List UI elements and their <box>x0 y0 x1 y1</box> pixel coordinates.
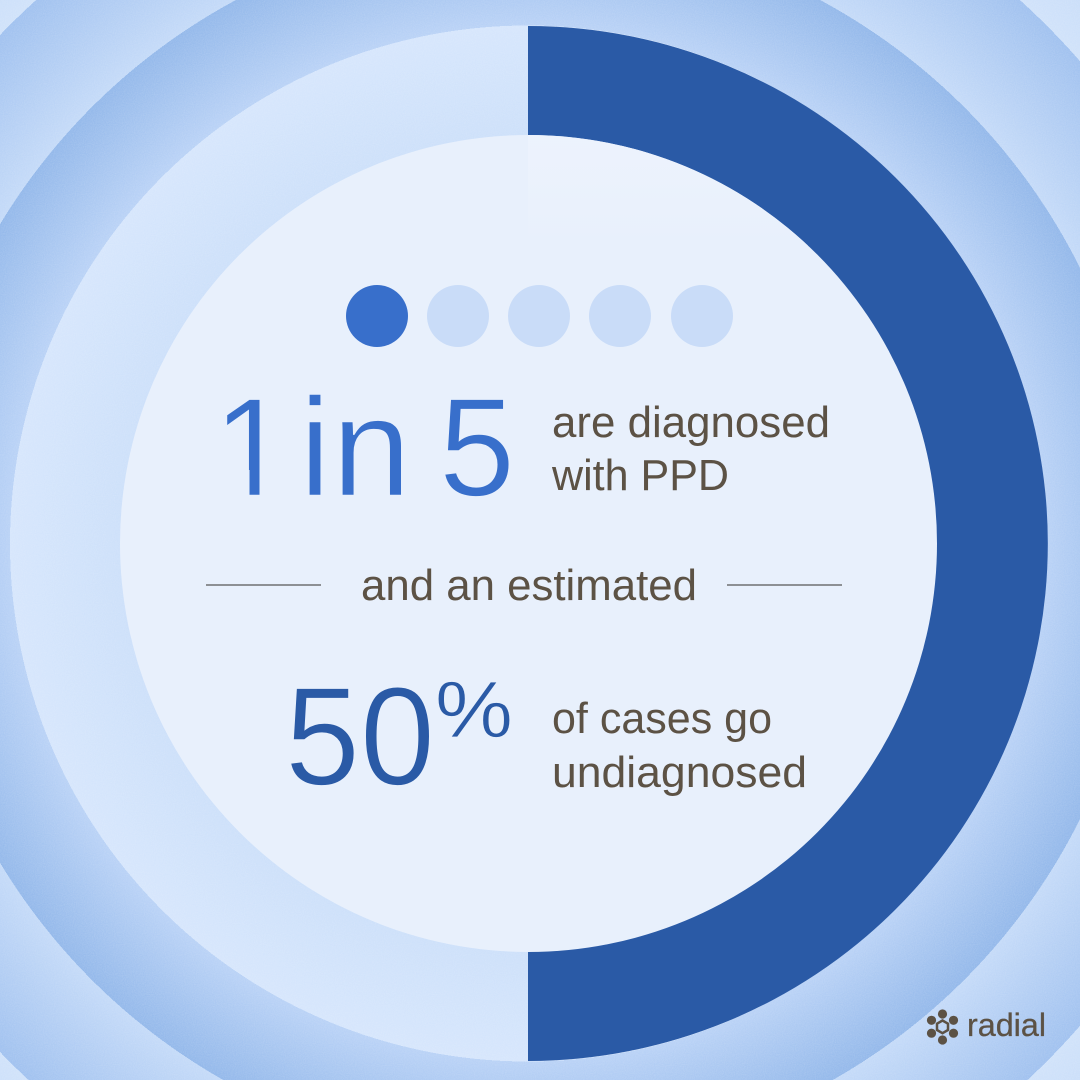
text: of cases go undiagnosed: undiagnosed <box>552 748 807 797</box>
big stat: 1 in 5: 1 <box>213 368 291 526</box>
icon: flower mark <box>927 1009 958 1045</box>
big stat: 1 in 5: 5 <box>439 368 515 526</box>
big stat: 1 in 5: n <box>332 368 411 526</box>
big stat: 1 in 5: i <box>300 368 331 526</box>
text: of cases go undiagnosed <box>552 694 807 797</box>
big stat: 1 in 5 <box>227 394 508 496</box>
big stat: 50%: % <box>435 665 513 754</box>
big stat: 50%: 50 <box>285 658 435 814</box>
text: are diagnosed with PPD <box>551 398 830 500</box>
text: of cases go undiagnosed: of cases go <box>552 694 772 743</box>
donut chart: half ring 50% arc <box>528 26 1048 1061</box>
dot row: 1 of 5 highlighted <box>346 285 733 347</box>
text: are diagnosed with PPD: are diagnosed <box>552 398 830 447</box>
big stat: 50% <box>285 658 513 814</box>
divider with text: and an estimated: and an estimated <box>361 561 697 610</box>
logo: radial <box>927 1007 1046 1045</box>
text: are diagnosed with PPD: with PPD <box>551 451 729 500</box>
inner circle panel <box>120 130 937 952</box>
logo: radial: radial <box>967 1007 1046 1043</box>
